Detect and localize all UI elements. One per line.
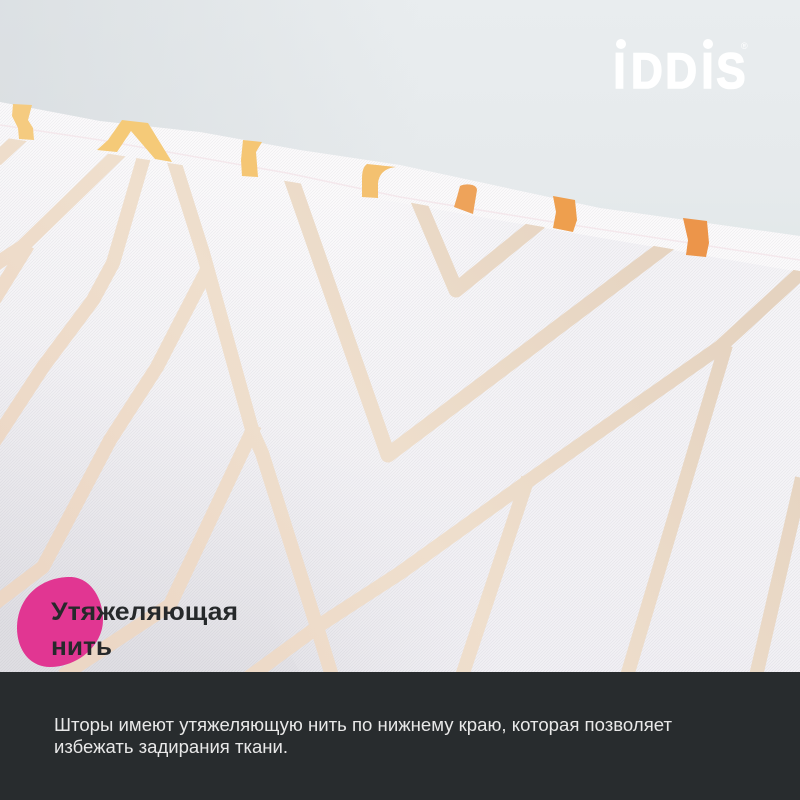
- description text: Шторы имеют утяжеляющую нить по нижнему краю, которая позволяет: [54, 714, 673, 735]
- background wall: [0, 0, 800, 300]
- logo: IDDIS: ®: [741, 41, 748, 51]
- curtain fabric: [0, 102, 800, 672]
- description text: [54, 714, 673, 757]
- pink blob accent: [17, 577, 103, 667]
- orange hem tabs: [12, 104, 709, 257]
- geometric print lines: [0, 136, 800, 680]
- hem seam stitching: [0, 125, 800, 260]
- heading: нить: [51, 633, 112, 661]
- logo: IDDIS: IDDIS: [613, 42, 746, 99]
- bottom dark band: [0, 672, 800, 800]
- heading: [51, 598, 238, 661]
- heading: Утяжеляющая: [51, 598, 238, 626]
- description text: избежать задирания ткани.: [54, 736, 288, 757]
